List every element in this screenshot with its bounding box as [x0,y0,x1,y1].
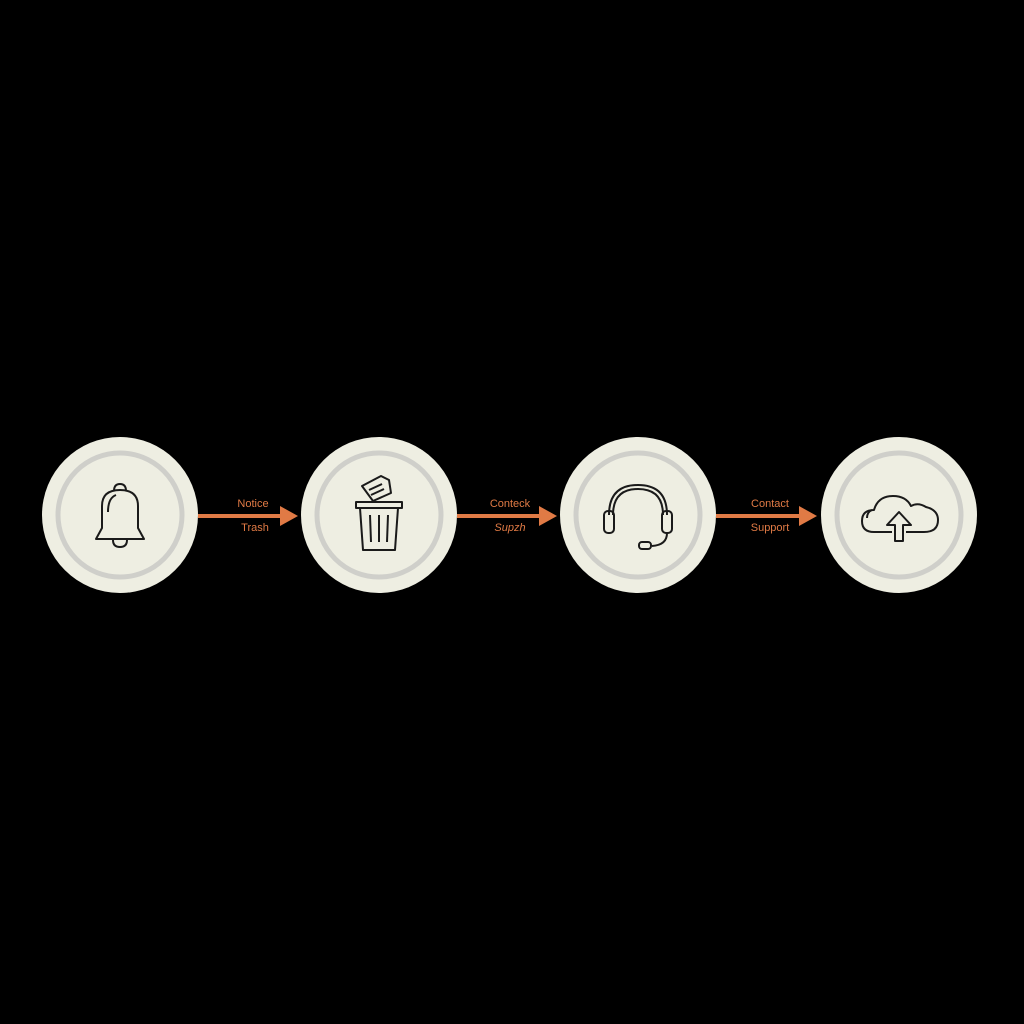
icon: cloud upload [862,496,938,541]
arrow 3 with labels: Contact [751,498,789,510]
arrow 2 with labels: Supzh [494,522,526,534]
icon: bell [96,484,144,547]
arrow 1 with labels: Trash [241,522,269,534]
icon: headset [604,485,672,549]
arrow 1 with labels [198,498,298,534]
arrow 3 with labels: Support [751,522,789,534]
icon: trash can [356,476,402,550]
step 2: trash circle [301,437,457,593]
arrow 2 with labels [457,498,557,534]
step 1: bell circle [42,437,198,593]
arrow 2 with labels: Conteck [490,498,531,510]
step 3: headset circle [560,437,716,593]
step 4: cloud upload circle [821,437,977,593]
arrow 3 with labels [716,498,817,534]
arrow 1 with labels: Notice [237,498,269,510]
